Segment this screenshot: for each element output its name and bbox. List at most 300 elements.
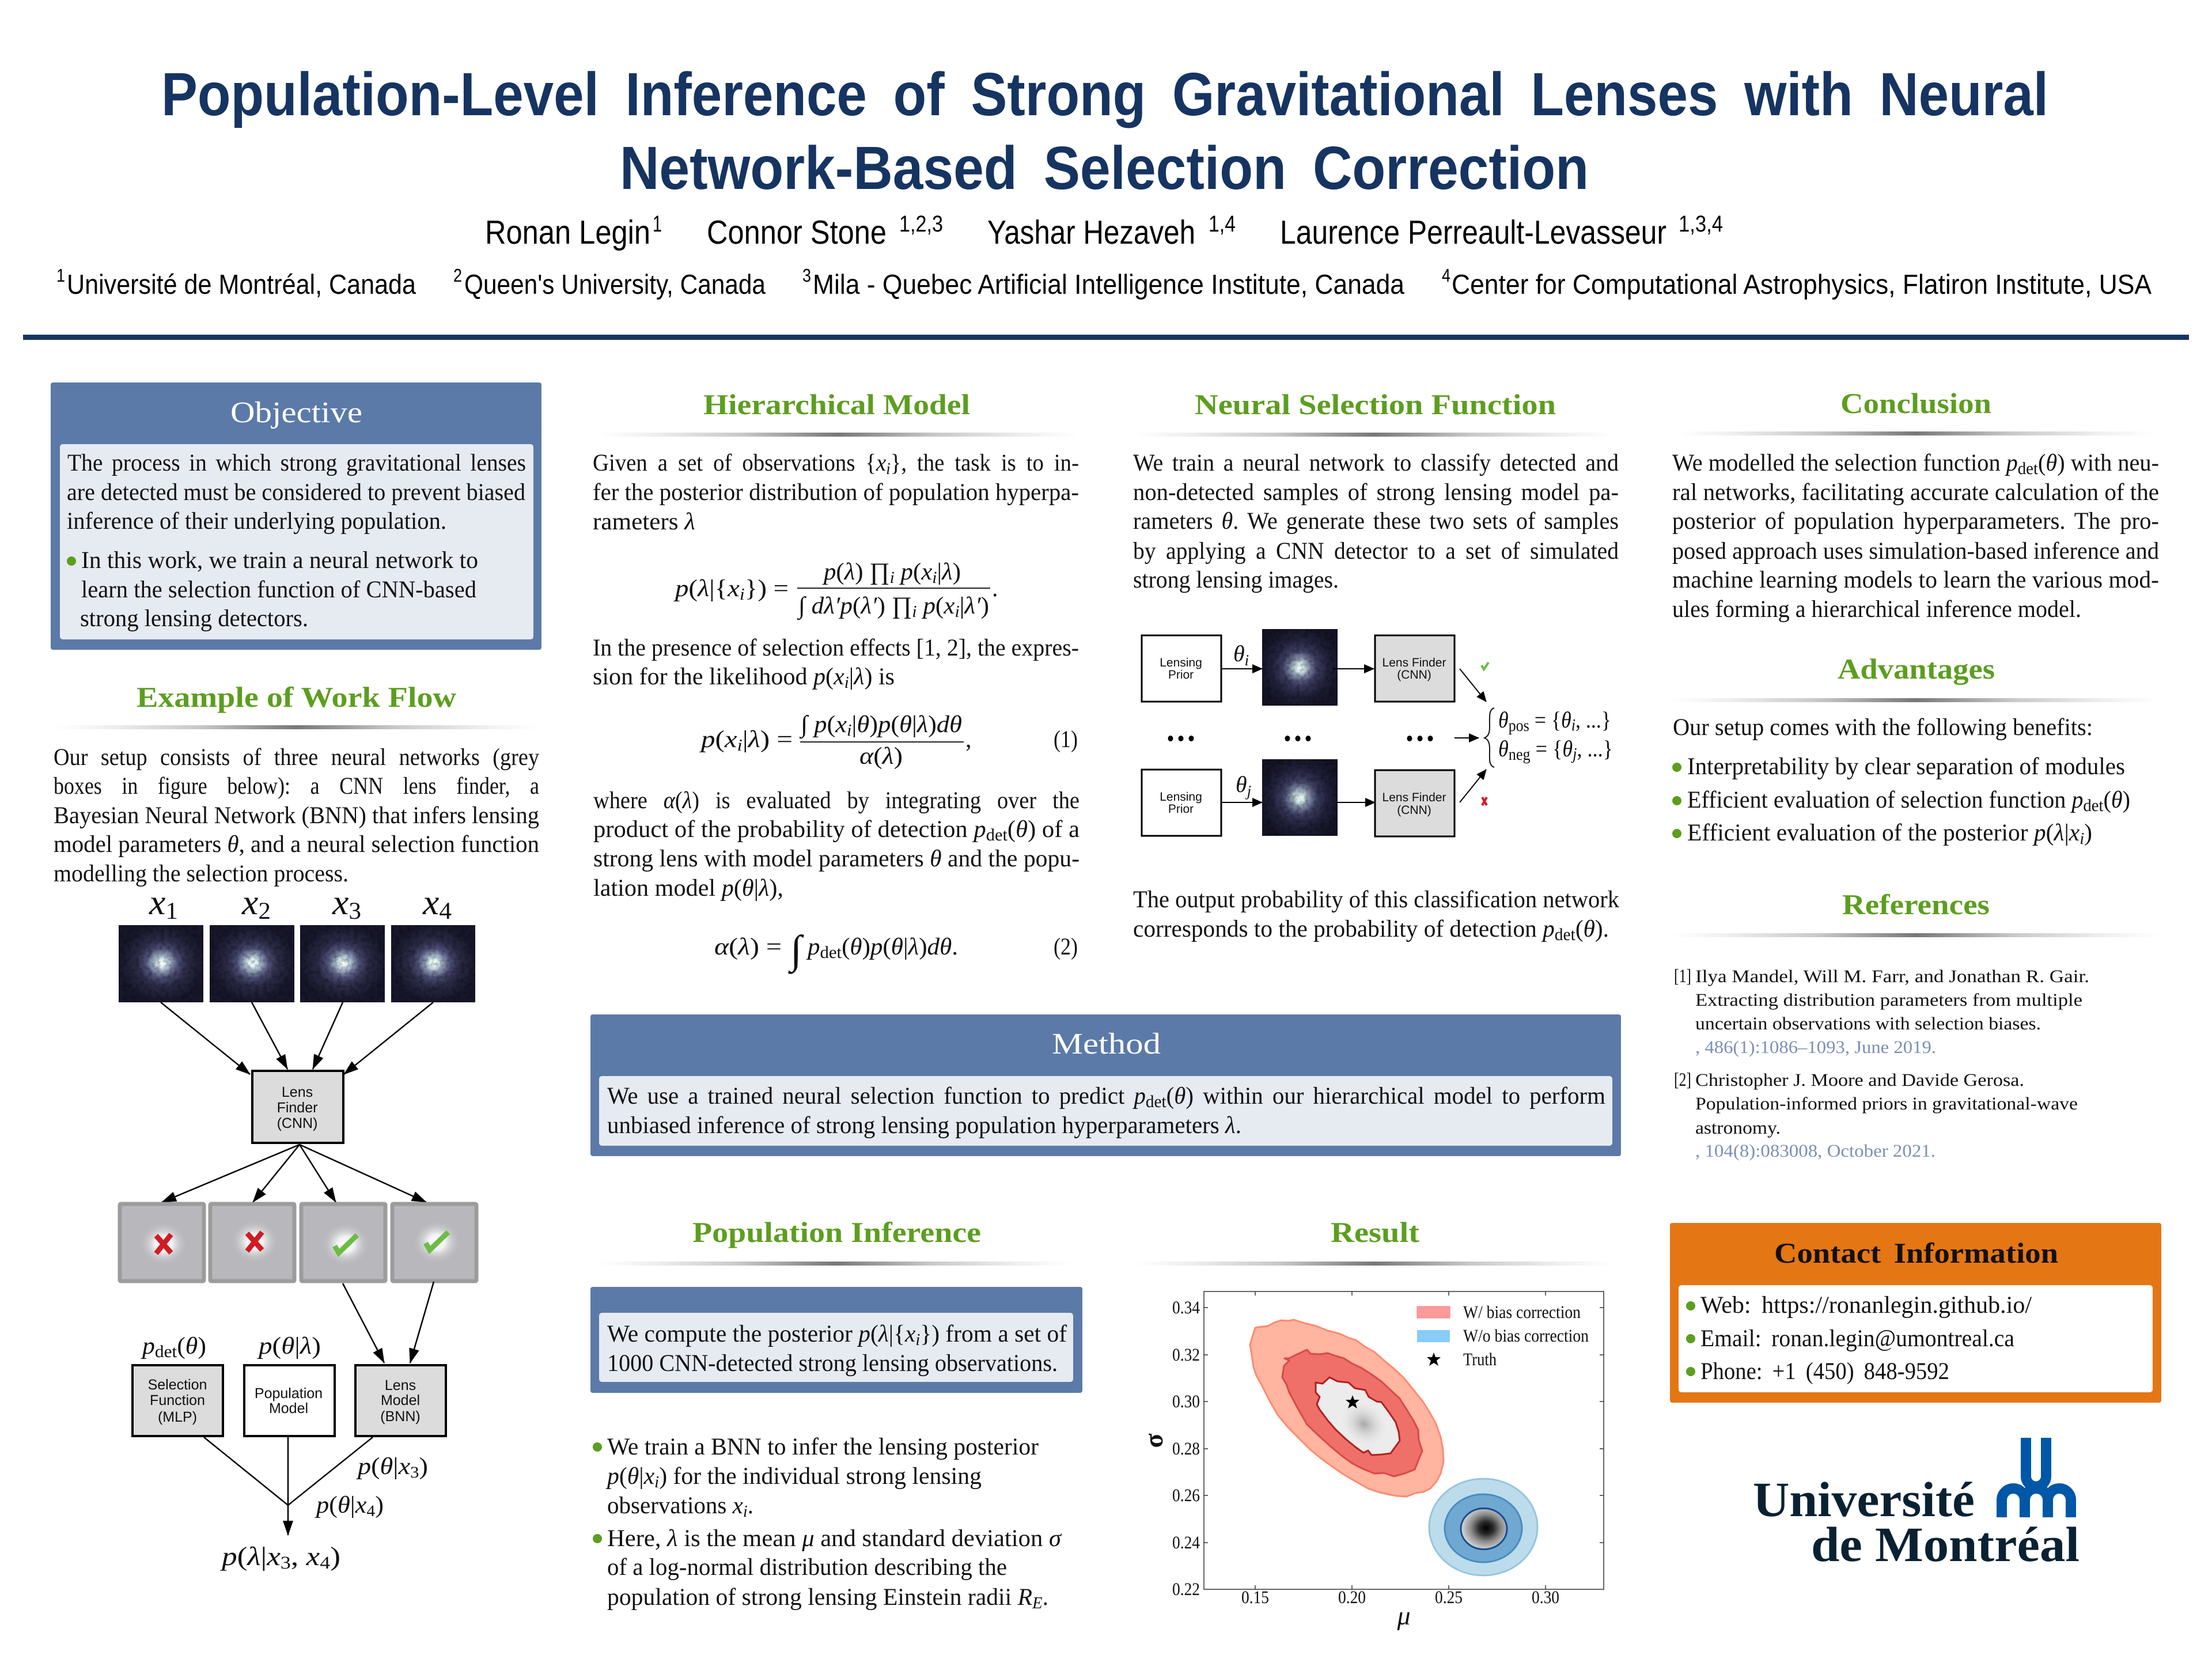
diagram math labels: 3 bbox=[281, 1552, 291, 1573]
lens model box: Lens bbox=[385, 1377, 416, 1393]
affiliations: 1 bbox=[56, 265, 65, 286]
equation: posterior: . bbox=[992, 575, 998, 602]
equation 1: i bbox=[737, 736, 743, 755]
population inference bullets: i bbox=[743, 1502, 748, 1521]
affiliations: 3 bbox=[802, 265, 811, 286]
diagram math labels: p(λ|x bbox=[222, 1541, 279, 1571]
alpha definition text bbox=[593, 787, 1080, 902]
advantages intro: Our setup comes with the following benefits: bbox=[1673, 714, 2093, 741]
contour chart bbox=[1139, 1291, 1604, 1630]
diagram math labels: ) bbox=[375, 1492, 384, 1518]
panel: population inference bbox=[590, 1216, 1082, 1612]
population inference callout: We compute the posterior p(λ|{x bbox=[607, 1321, 916, 1347]
chart legend: W/ bias correction bbox=[1463, 1302, 1581, 1322]
brace and theta sets: θ bbox=[1498, 707, 1509, 733]
population inference bullets: . bbox=[748, 1493, 753, 1519]
equation 1: i bbox=[847, 721, 852, 740]
y axis labels: 0.28 bbox=[1172, 1438, 1200, 1459]
advantages bullets: Efficient evaluation of the posterior p(λ|x bbox=[1687, 820, 2080, 846]
alpha definition text: θ) of a bbox=[1016, 816, 1079, 843]
output probability text: θ). bbox=[1584, 916, 1609, 942]
icon: small green check bbox=[1482, 662, 1488, 669]
title: Network-Based Selection Correction bbox=[620, 134, 1589, 202]
population inference callout bbox=[590, 1287, 1082, 1393]
population model box: Population bbox=[255, 1385, 323, 1402]
population inference callout: }) from a set of bbox=[920, 1321, 1067, 1347]
chart legend: Truth bbox=[1463, 1349, 1497, 1369]
contact heading: Contact Information bbox=[1774, 1237, 2058, 1269]
objective body: In this work, we train a neural network to bbox=[81, 547, 478, 574]
selection function box bbox=[132, 1365, 223, 1436]
equation: posterior: | bbox=[937, 559, 942, 585]
conclusion text bbox=[1672, 450, 2159, 623]
authors: 1 bbox=[653, 211, 662, 237]
diagram math labels: p bbox=[141, 1333, 155, 1359]
population inference bullets: of a log-normal distribution describing the bbox=[607, 1554, 1007, 1581]
equation: posterior: p(λ) ∏ bbox=[824, 559, 889, 585]
hierarchical intro text: rameters λ bbox=[593, 509, 695, 535]
work flow text: model parameters θ, and a neural selection function bbox=[54, 831, 539, 858]
selection effects text: In the presence of selection effects [1, 2], the expres- bbox=[593, 635, 1079, 661]
alpha definition text: strong lens with model parameters θ and the popu- bbox=[593, 846, 1080, 872]
population model box bbox=[244, 1365, 335, 1436]
selection function box: (MLP) bbox=[158, 1409, 197, 1425]
authors: Laurence Perreault-Levasseur bbox=[1280, 214, 1666, 251]
diagram math labels: ) bbox=[419, 1453, 428, 1480]
reference 2 bbox=[1674, 1070, 2078, 1161]
neural selection text bbox=[1133, 450, 1619, 593]
diagram math labels: ( bbox=[177, 1333, 185, 1359]
hierarchical model heading: Hierarchical Model bbox=[703, 388, 970, 421]
equation: posterior: λ) bbox=[942, 559, 961, 585]
diagram math labels: p(θ|x bbox=[316, 1492, 366, 1518]
authors: Ronan Legin bbox=[485, 214, 650, 251]
output probability text bbox=[1133, 887, 1619, 944]
affiliations bbox=[56, 265, 2152, 300]
alpha definition text: ( bbox=[1007, 816, 1016, 843]
advantages bullets: det bbox=[2083, 796, 2104, 815]
conclusion heading: Conclusion bbox=[1840, 387, 1991, 419]
equation 2: det bbox=[820, 943, 842, 962]
panel: objective bbox=[51, 382, 541, 650]
method body: θ) within our hierarchical model to perform bbox=[1174, 1083, 1616, 1109]
icon: green check bbox=[335, 1235, 357, 1253]
equation 1: α(λ) bbox=[859, 743, 903, 770]
arrows into lens finder bbox=[161, 1002, 433, 1074]
advantages heading: Advantages bbox=[1838, 653, 1995, 685]
observation labels: x bbox=[423, 883, 439, 922]
y axis labels: 0.22 bbox=[1172, 1579, 1200, 1599]
panel: result bbox=[1134, 1216, 1614, 1630]
reference 1: [1] bbox=[1674, 966, 1691, 987]
icon: small red cross bbox=[1482, 797, 1487, 805]
arrows into posterior bbox=[204, 1437, 373, 1535]
reference 1: , 486(1):1086–1093, June 2019. bbox=[1695, 1037, 1936, 1057]
diagram math labels: p(θ|λ) bbox=[257, 1333, 321, 1359]
y axis labels: 0.32 bbox=[1172, 1344, 1200, 1365]
classification tiles bbox=[120, 1204, 476, 1281]
advantages bullets: θ) bbox=[2111, 787, 2131, 813]
equation: posterior: i bbox=[890, 569, 895, 587]
brace and theta sets: , ...} bbox=[1575, 707, 1611, 733]
poster header bbox=[23, 60, 2189, 340]
lensing prior box top: Prior bbox=[1168, 668, 1194, 681]
logo: Université de Montréal: de Montréal bbox=[1811, 1517, 2080, 1572]
panel: advantages bbox=[1672, 653, 2158, 848]
lens finder box: (CNN) bbox=[277, 1115, 317, 1131]
x axis labels bbox=[1241, 1587, 1559, 1607]
x axis labels: 0.20 bbox=[1338, 1587, 1366, 1607]
brace and theta sets: pos bbox=[1509, 717, 1529, 735]
diagram math labels bbox=[141, 1333, 428, 1573]
theta labels: i bbox=[1245, 652, 1249, 669]
reference 2: [2] bbox=[1674, 1070, 1691, 1090]
reference 1: uncertain observations with selection biases. bbox=[1695, 1013, 2041, 1033]
lens finder box bbox=[252, 1071, 343, 1143]
x axis labels: 0.15 bbox=[1241, 1587, 1269, 1607]
method body: ( bbox=[1166, 1083, 1174, 1109]
objective body: strong lensing detectors. bbox=[80, 605, 308, 632]
authors: Yashar Hezaveh bbox=[987, 214, 1195, 251]
references heading: References bbox=[1842, 888, 1990, 921]
equation 2 bbox=[714, 928, 1078, 974]
work flow text: modelling the selection process. bbox=[54, 861, 349, 887]
equation 1 bbox=[699, 711, 1078, 770]
equation 1: λ) = bbox=[748, 726, 788, 753]
x axis labels: 0.30 bbox=[1532, 1587, 1559, 1607]
contact details: Phone: +1 (450) 848-9592 bbox=[1700, 1358, 1949, 1385]
contact details: Email: ronan.legin@umontreal.ca bbox=[1700, 1325, 2014, 1352]
brace and theta sets: θ bbox=[1562, 736, 1573, 762]
lens model box bbox=[355, 1365, 446, 1436]
advantages bullets: i bbox=[2080, 830, 2084, 848]
panel: neural selection function bbox=[1133, 388, 1619, 944]
output probability text: det bbox=[1555, 925, 1575, 944]
authors: Connor Stone bbox=[707, 214, 887, 251]
y axis labels: 0.26 bbox=[1172, 1485, 1200, 1505]
diagram math labels: ) bbox=[330, 1541, 340, 1571]
result heading: Result bbox=[1331, 1216, 1419, 1248]
theta labels: θ bbox=[1233, 641, 1245, 666]
brace and theta sets: j bbox=[1571, 745, 1577, 763]
y axis labels: 0.30 bbox=[1172, 1391, 1200, 1411]
lens finder box: Finder bbox=[277, 1100, 317, 1116]
equation 1: ∫ p(x bbox=[801, 711, 846, 738]
objective body: inference of their underlying population. bbox=[67, 508, 446, 535]
population inference bullets bbox=[593, 1434, 1062, 1612]
method body: det bbox=[1146, 1092, 1166, 1111]
selection training diagram bbox=[1142, 629, 1613, 836]
population inference bullets: E bbox=[1032, 1594, 1043, 1612]
selection effects text bbox=[593, 635, 1079, 692]
conclusion text: θ) with neu- bbox=[2046, 450, 2164, 476]
brace and theta sets bbox=[1484, 707, 1613, 767]
equation 2: ∫ bbox=[788, 928, 804, 974]
icon: university emblem bbox=[2002, 1438, 2071, 1517]
hierarchical intro text: fer the posterior distribution of population hyperpa- bbox=[593, 479, 1079, 506]
equation: posterior: (x bbox=[913, 559, 932, 585]
work flow text: Our setup consists of three neural networks (grey bbox=[54, 744, 539, 771]
equation 1: , bbox=[965, 726, 971, 753]
affiliations: Queen's University, Canada bbox=[464, 270, 766, 300]
authors: 1,4 bbox=[1209, 211, 1236, 237]
posterior with bias correction bbox=[1250, 1320, 1444, 1497]
population inference bullets: Here, λ is the mean μ and standard deviation σ bbox=[607, 1525, 1062, 1552]
logo: Université de Montréal bbox=[1753, 1438, 2080, 1572]
brace and theta sets: neg bbox=[1509, 745, 1531, 764]
lens image bottom bbox=[1262, 759, 1338, 836]
brace and theta sets: , ...} bbox=[1577, 736, 1613, 762]
output probability text: ( bbox=[1575, 916, 1584, 942]
lensing prior box top: Lensing bbox=[1160, 656, 1202, 669]
selection effects text: | bbox=[849, 664, 854, 690]
neural selection text: We train a neural network to classify detected and bbox=[1133, 450, 1619, 476]
equation 2: α(λ) = bbox=[714, 934, 782, 960]
neural selection text: non-detected samples of strong lensing model pa- bbox=[1133, 479, 1619, 506]
contact details bbox=[1679, 1285, 2153, 1392]
population inference bullets: i bbox=[654, 1473, 659, 1491]
neural selection heading: Neural Selection Function bbox=[1195, 388, 1556, 421]
lens model box: Model bbox=[381, 1392, 420, 1408]
panel: references bbox=[1672, 888, 2160, 1161]
selection function box: Selection bbox=[148, 1377, 207, 1393]
work flow text: Bayesian Neural Network (BNN) that infers lensing bbox=[54, 802, 539, 829]
affiliations: 2 bbox=[453, 265, 462, 286]
selection effects text: sion for the likelihood p(x bbox=[593, 664, 844, 690]
population inference bullets: ) for the individual strong lensing bbox=[659, 1463, 982, 1490]
lensing prior box bottom bbox=[1142, 770, 1221, 836]
icon: truth star bbox=[1346, 1395, 1359, 1408]
alpha definition text: lation model p(θ|λ), bbox=[593, 875, 783, 902]
brace and theta sets: = { bbox=[1531, 736, 1562, 762]
diagram math labels: θ) bbox=[185, 1333, 206, 1359]
conclusion text: posed approach uses simulation-based inference and bbox=[1672, 538, 2159, 565]
arrows to lens model bbox=[343, 1282, 434, 1363]
population inference callout: 1000 CNN-detected strong lensing observations. bbox=[607, 1350, 1058, 1377]
objective body bbox=[60, 444, 533, 639]
population inference heading: Population Inference bbox=[692, 1216, 981, 1248]
hierarchical intro text: }, the task is to in- bbox=[891, 450, 1079, 476]
advantages bullets: ) bbox=[2084, 820, 2092, 846]
panel: example of work flow bbox=[54, 681, 539, 1573]
conclusion text: machine learning models to learn the various mod- bbox=[1672, 567, 2159, 593]
icon: legend star bbox=[1427, 1353, 1441, 1366]
lens image top bbox=[1262, 629, 1338, 706]
brace and theta sets: θ bbox=[1498, 736, 1509, 762]
alpha definition text: where α(λ) is evaluated by integrating over the bbox=[593, 787, 1080, 814]
brace and theta sets: θ bbox=[1561, 707, 1571, 733]
work flow diagram bbox=[119, 883, 476, 1573]
diagram math labels: det bbox=[155, 1342, 177, 1361]
diagram math labels: 4 bbox=[366, 1502, 375, 1520]
y axis labels: 0.24 bbox=[1172, 1532, 1200, 1552]
y axis labels bbox=[1172, 1297, 1200, 1599]
lensing prior box top bbox=[1142, 635, 1221, 702]
objective body: The process in which strong gravitational lenses bbox=[67, 450, 526, 476]
axis titles: μ bbox=[1396, 1601, 1411, 1630]
population inference bullets: We train a BNN to infer the lensing posterior bbox=[607, 1434, 1039, 1460]
equation 2: p bbox=[806, 934, 820, 960]
contact details: Web: https://ronanlegin.github.io/ bbox=[1700, 1292, 2032, 1319]
equation 2: (2) bbox=[1054, 934, 1078, 960]
alpha definition text: product of the probability of detection p bbox=[593, 816, 986, 843]
conclusion text: We modelled the selection function p bbox=[1672, 450, 2018, 476]
neural selection text: strong lensing images. bbox=[1133, 567, 1339, 593]
objective body: are detected must be considered to prevent biased bbox=[67, 479, 525, 506]
logo: Université de Montréal: Université bbox=[1753, 1472, 1975, 1527]
equation 1: | bbox=[743, 726, 748, 753]
chart legend bbox=[1417, 1302, 1589, 1369]
population inference bullets: population of strong lensing Einstein radii R bbox=[607, 1584, 1032, 1611]
brace and theta sets: = { bbox=[1529, 707, 1561, 733]
reference 2: astronomy. bbox=[1695, 1118, 1781, 1138]
diagram math labels: p(θ|x bbox=[358, 1453, 409, 1480]
conclusion text: posterior of population hyperparameters. The pro- bbox=[1672, 508, 2159, 535]
equation 1: (1) bbox=[1054, 726, 1078, 753]
affiliations: Center for Computational Astrophysics, Flatiron Institute, USA bbox=[1452, 270, 2152, 300]
equation 2: θ)p(θ|λ)dθ. bbox=[850, 934, 958, 960]
equation: posterior: p bbox=[899, 559, 913, 585]
ellipsis dots bbox=[1168, 736, 1433, 741]
selection effects text: i bbox=[844, 673, 849, 692]
conclusion text: ral networks, facilitating accurate calculation of the bbox=[1672, 479, 2159, 506]
observation labels: 4 bbox=[439, 898, 452, 925]
alpha definition text: det bbox=[986, 825, 1008, 844]
posterior without bias correction bbox=[1429, 1479, 1537, 1575]
equation 1: | bbox=[852, 711, 857, 738]
equation: posterior: }) = bbox=[745, 575, 789, 602]
equation: posterior: i bbox=[955, 603, 960, 621]
equation: posterior: ∫ dλ′p(λ′) ∏ bbox=[798, 593, 911, 619]
lens finder box top: (CNN) bbox=[1397, 668, 1431, 681]
population inference bullets: observations x bbox=[607, 1493, 743, 1519]
work flow text bbox=[54, 744, 539, 887]
lens finder box top bbox=[1375, 635, 1455, 702]
equation: posterior: λ′) bbox=[964, 593, 989, 619]
hierarchical intro text bbox=[593, 450, 1079, 535]
observation labels: 1 bbox=[165, 898, 178, 925]
population inference bullets: . bbox=[1043, 1584, 1048, 1611]
equation: posterior: p bbox=[921, 593, 935, 619]
neural selection text: rameters θ. We generate these two sets of samples bbox=[1133, 508, 1619, 535]
diagram math labels: 3 bbox=[410, 1464, 419, 1482]
work flow text: boxes in figure below): a CNN lens finder, a bbox=[54, 773, 539, 800]
output probability text: The output probability of this classification network bbox=[1133, 887, 1619, 913]
icon: green check bbox=[426, 1232, 448, 1250]
lens model box: (BNN) bbox=[380, 1408, 421, 1425]
observation labels: 3 bbox=[349, 898, 361, 925]
equation: posterior: (x bbox=[935, 593, 955, 619]
authors: 1,3,4 bbox=[1679, 211, 1723, 237]
lens finder box top: Lens Finder bbox=[1382, 656, 1446, 669]
icon: red cross bbox=[156, 1234, 171, 1253]
advantages bullets: Interpretability by clear separation of modules bbox=[1687, 753, 2125, 780]
lensing prior box bottom: Lensing bbox=[1160, 790, 1202, 804]
diagram math labels: , bbox=[291, 1541, 306, 1571]
selection function box: Function bbox=[150, 1392, 205, 1408]
method body: unbiased inference of strong lensing population hyperparameters λ. bbox=[607, 1112, 1241, 1139]
equation: posterior: p(λ|{x bbox=[675, 575, 738, 602]
reference 2: Population-informed priors in gravitational-wave bbox=[1695, 1093, 2078, 1113]
objective heading: Objective bbox=[230, 396, 362, 429]
diagram math labels: 4 bbox=[320, 1552, 331, 1573]
equation: posterior: i bbox=[740, 585, 745, 604]
x axis labels: 0.25 bbox=[1435, 1587, 1463, 1607]
neural selection text: by applying a CNN detector to a set of simulated bbox=[1133, 538, 1619, 565]
equation 2: ( bbox=[842, 934, 850, 960]
axis titles bbox=[1139, 1433, 1411, 1630]
method body: We use a trained neural selection function to predict p bbox=[607, 1083, 1146, 1109]
equation: posterior: i bbox=[932, 569, 937, 587]
population model box: Model bbox=[269, 1400, 308, 1416]
title bbox=[161, 60, 2048, 202]
selection effects text: λ) is bbox=[854, 664, 895, 690]
reference 2: Christopher J. Moore and Davide Gerosa. bbox=[1695, 1070, 2024, 1090]
theta labels bbox=[1233, 641, 1251, 800]
chart legend: W/o bias correction bbox=[1463, 1325, 1589, 1346]
population inference callout: i bbox=[915, 1331, 920, 1349]
panel: method bbox=[590, 1014, 1621, 1156]
lens finder box bottom: Lens Finder bbox=[1382, 791, 1446, 804]
theta labels: j bbox=[1245, 782, 1251, 800]
observation labels bbox=[149, 883, 452, 925]
y axis labels: 0.34 bbox=[1172, 1297, 1200, 1317]
lens finder box: Lens bbox=[282, 1084, 313, 1100]
lens image tiles bbox=[119, 925, 475, 1002]
reference 2: , 104(8):083008, October 2021. bbox=[1695, 1141, 1936, 1161]
output probability text: corresponds to the probability of detection p bbox=[1133, 916, 1555, 942]
advantages bullets: ( bbox=[2103, 787, 2111, 813]
work flow heading: Example of Work Flow bbox=[137, 681, 456, 713]
observation labels: x bbox=[242, 883, 258, 922]
observation labels: x bbox=[332, 883, 349, 922]
lens finder box bottom bbox=[1375, 770, 1455, 836]
authors: 1,2,3 bbox=[899, 211, 943, 237]
equation 1: θ)p(θ|λ)dθ bbox=[857, 711, 961, 738]
equation 1: p(x bbox=[701, 726, 735, 753]
observation labels: x bbox=[149, 883, 165, 922]
affiliations: 4 bbox=[1442, 265, 1450, 286]
equation: posterior bbox=[673, 559, 998, 623]
method body bbox=[599, 1076, 1612, 1146]
diagram math labels: x bbox=[305, 1541, 320, 1571]
hierarchical intro text: Given a set of observations {x bbox=[593, 450, 900, 476]
equation: posterior: | bbox=[960, 593, 964, 619]
conclusion text: det bbox=[2018, 459, 2039, 478]
observation labels: 2 bbox=[258, 898, 271, 925]
objective body: learn the selection function of CNN-based bbox=[81, 577, 476, 603]
conclusion text: ules forming a hierarchical inference model. bbox=[1672, 596, 2081, 623]
conclusion text: ( bbox=[2038, 450, 2046, 476]
affiliations: Mila - Quebec Artificial Intelligence Institute, Canada bbox=[813, 270, 1404, 300]
method heading: Method bbox=[1052, 1028, 1161, 1060]
icon: red cross bbox=[247, 1232, 262, 1251]
authors bbox=[485, 211, 1723, 251]
advantages bullets bbox=[1672, 753, 2130, 848]
panel: conclusion bbox=[1672, 387, 2159, 623]
brace and theta sets: i bbox=[1571, 716, 1575, 734]
equation: posterior: i bbox=[912, 603, 917, 621]
diagram arrows bbox=[1221, 669, 1486, 802]
reference 1 bbox=[1674, 966, 2089, 1057]
reference 1: Extracting distribution parameters from multiple bbox=[1695, 990, 2082, 1010]
population inference bullets: p(θ|x bbox=[607, 1463, 654, 1490]
axis titles: σ bbox=[1139, 1433, 1168, 1448]
theta labels: θ bbox=[1236, 771, 1247, 797]
lens finder box bottom: (CNN) bbox=[1397, 804, 1431, 817]
panel: contact information bbox=[1670, 1223, 2161, 1403]
affiliations: Université de Montréal, Canada bbox=[67, 270, 416, 300]
